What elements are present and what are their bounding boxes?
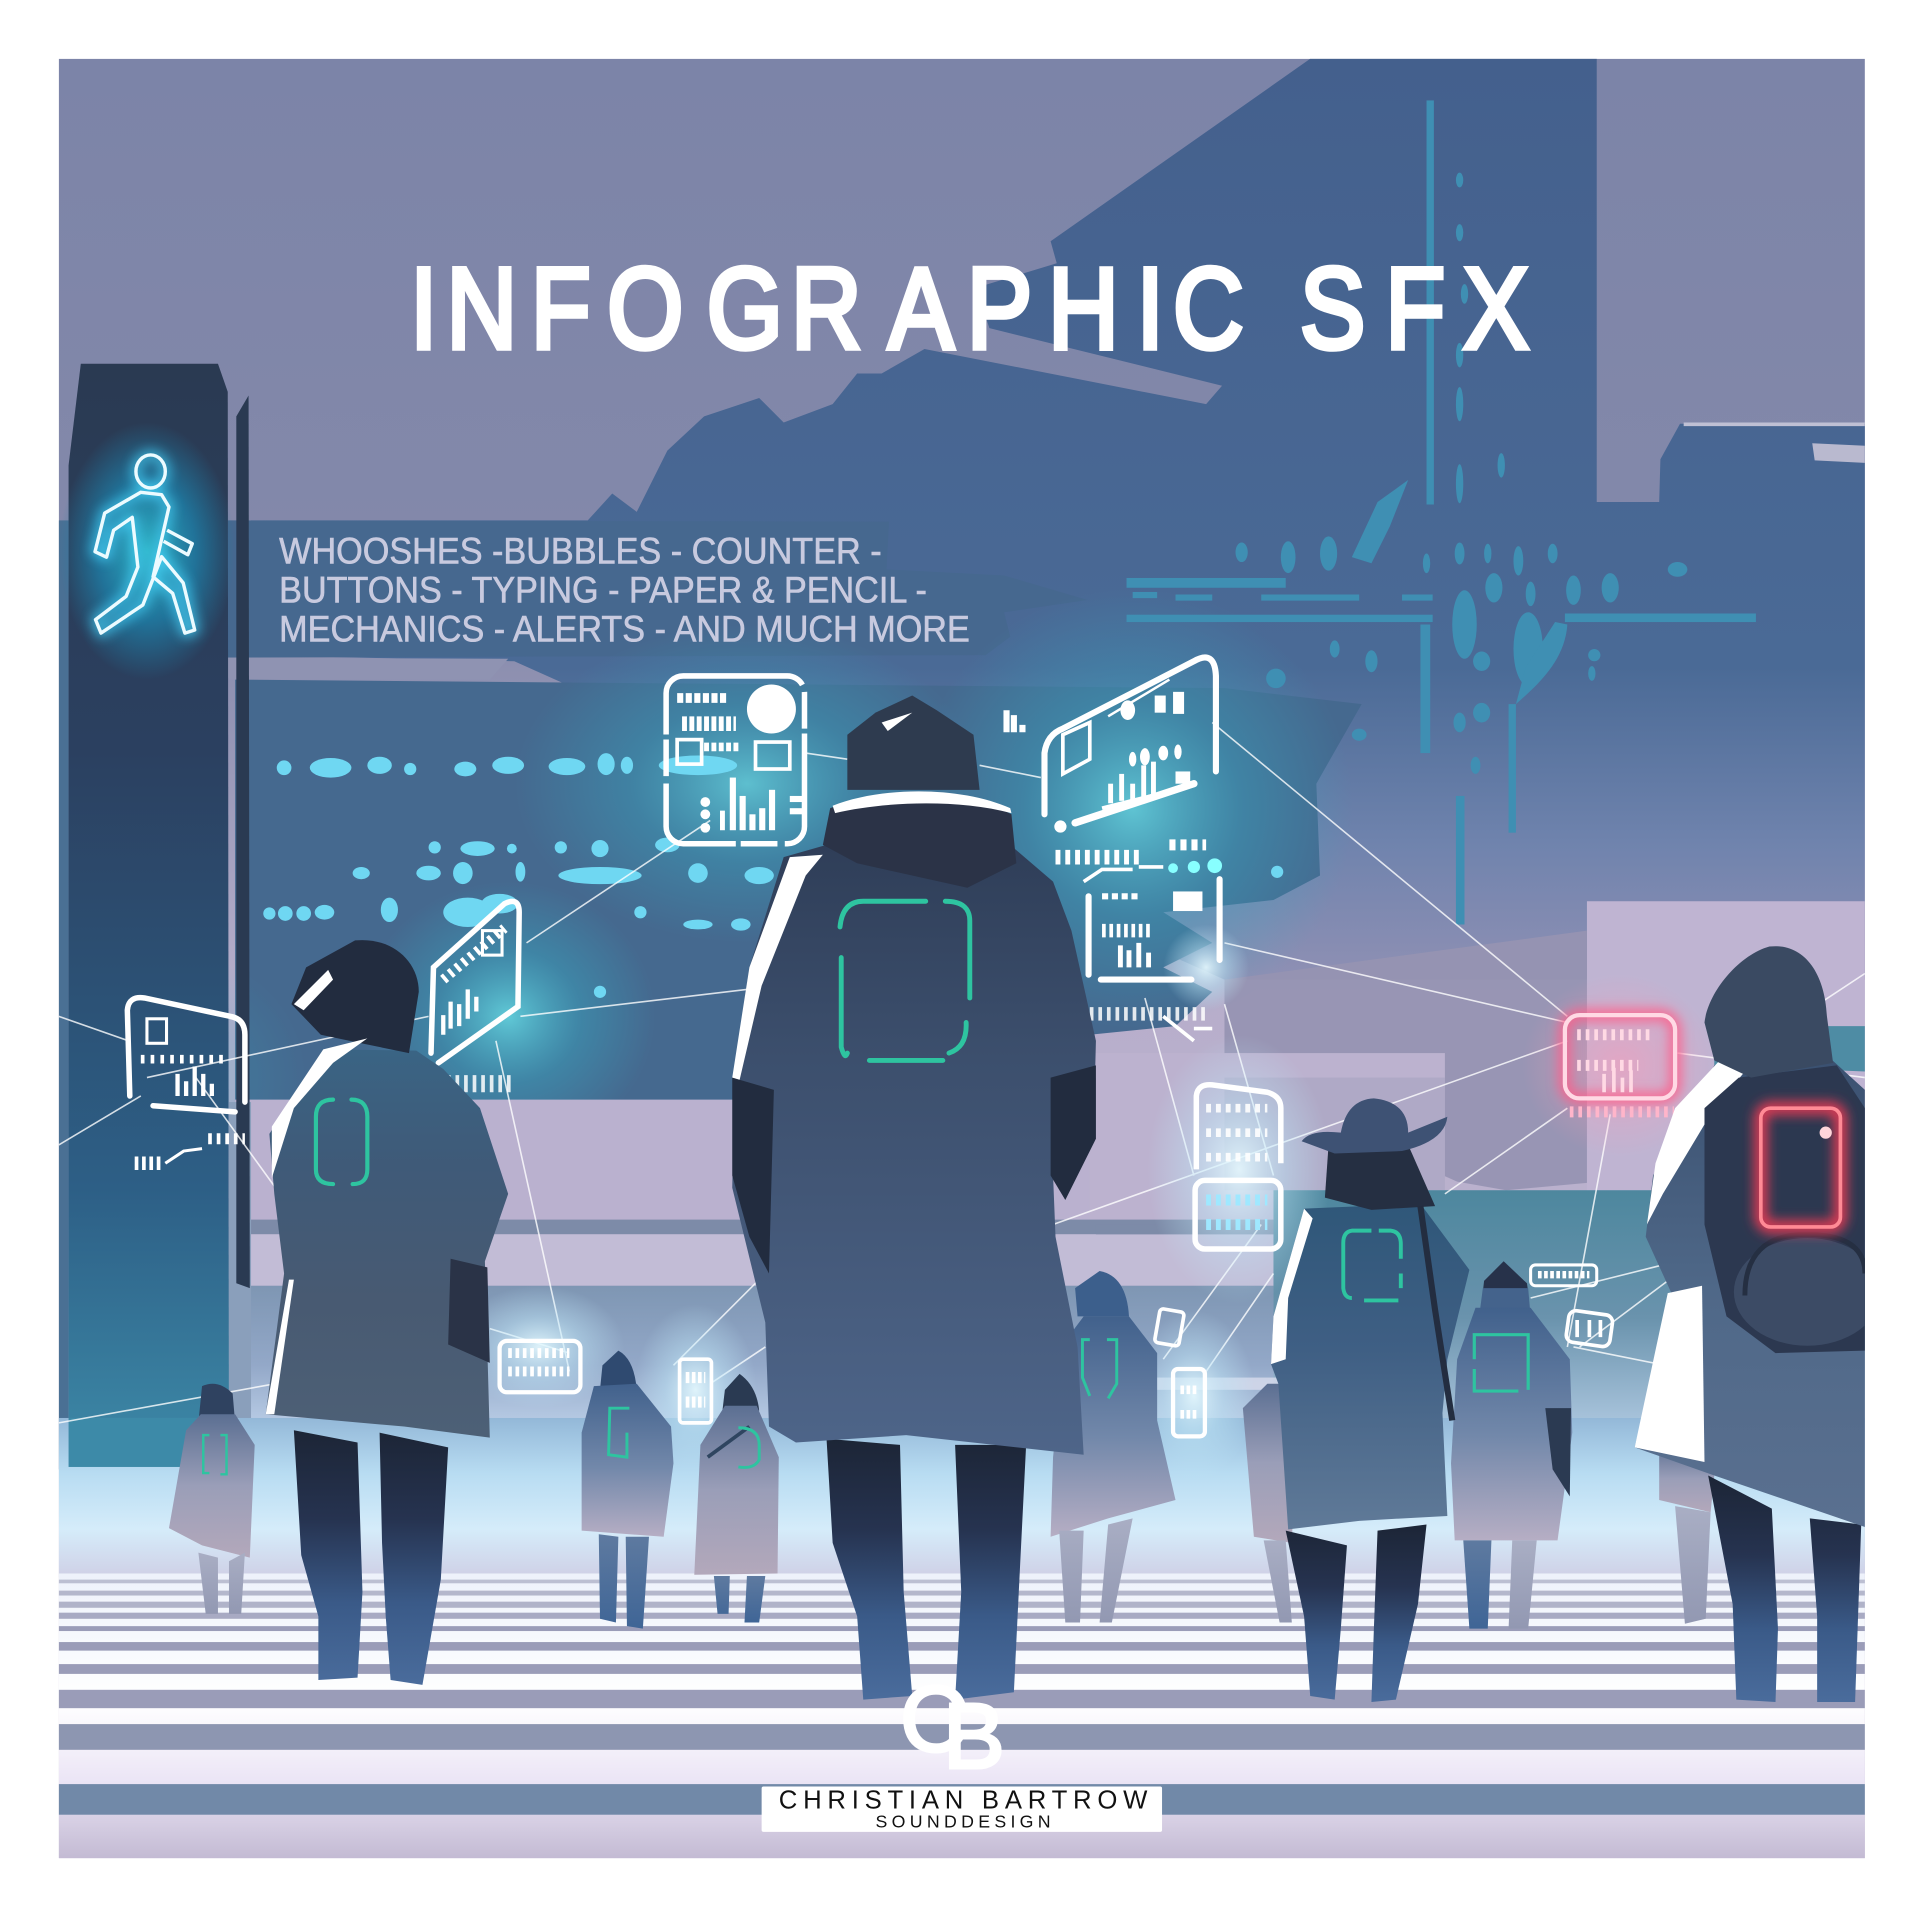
person: small with strap — [694, 1374, 779, 1622]
right side lavender block — [1587, 901, 1865, 1090]
glowing data dots — [263, 753, 1283, 998]
screen: portrait centre-left — [666, 676, 804, 844]
teal glows behind screens — [61, 588, 1353, 1200]
floor gradient — [59, 1418, 1865, 1577]
screen: tilted right large — [1007, 657, 1222, 882]
person: right of hat figure — [1451, 1261, 1572, 1629]
logo: CB monogram: C — [900, 1667, 967, 1771]
person: far right behind — [1659, 1445, 1714, 1624]
feature list text: BUTTONS - TYPING - PAPER & PENCIL - — [279, 569, 927, 610]
screen: far left — [127, 998, 245, 1163]
text banner band — [228, 520, 350, 658]
title: INFOGRAPHIC SFX — [410, 243, 1529, 373]
blue city buildings — [251, 59, 1865, 980]
person: distant centre right — [1051, 1271, 1176, 1622]
screen: middle left tilted — [431, 901, 519, 1084]
feature list text: WHOOSHES -BUBBLES - COUNTER - — [279, 530, 882, 571]
screen: pink alert — [1565, 1015, 1675, 1112]
person: hat figure — [1271, 1098, 1469, 1702]
brand plate: CHRISTIAN BARTROW — [779, 1787, 1148, 1815]
walk signal pillar — [59, 364, 250, 1469]
lavender wedge — [228, 658, 508, 661]
logo: CB monogram: B — [943, 1684, 1005, 1788]
person: centre large — [732, 696, 1096, 1700]
brand plate — [762, 1787, 1162, 1832]
screen: tall right panels — [1195, 1085, 1281, 1249]
icon: walking pedestrian neon — [66, 430, 228, 672]
teal strip top right — [1714, 1026, 1865, 1071]
screen glows — [488, 929, 1700, 1452]
person: far left small — [169, 1384, 255, 1614]
person: behind hat figure — [1243, 1384, 1298, 1622]
pillar base reflection — [68, 1418, 198, 1467]
lavender mid wall and bands — [229, 1053, 1865, 1423]
logo: CB monogram — [900, 1667, 1005, 1788]
person: small near post — [582, 1351, 673, 1629]
person: left large — [266, 940, 508, 1685]
crosswalk — [59, 1573, 1865, 1859]
feature list text — [279, 530, 970, 650]
screen: lower right panel — [1089, 879, 1220, 1041]
brand plate: SOUNDDESIGN — [876, 1812, 1051, 1832]
teal street-map circuit lines — [1127, 100, 1756, 925]
small floating screens — [500, 1265, 1613, 1436]
network lines — [59, 722, 1865, 1423]
feature list text: MECHANICS - ALERTS - AND MUCH MORE — [279, 609, 970, 650]
people group — [169, 696, 1881, 1702]
person: right large with backpack — [1635, 946, 1881, 1702]
grey mid-distance building — [1224, 931, 1587, 1190]
data panel with teal haze — [235, 680, 1362, 1102]
